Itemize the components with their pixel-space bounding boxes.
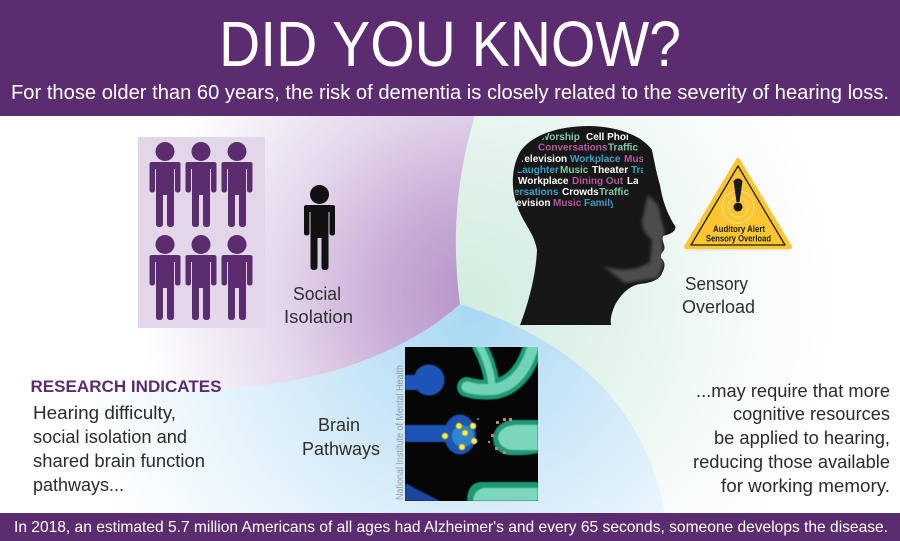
footer banner xyxy=(0,513,900,541)
label: sensory overload: Sensory xyxy=(685,274,748,294)
word cloud: Music xyxy=(560,165,589,176)
label: brain pathways: Brain xyxy=(318,415,360,435)
text block: conclusion: ...may require that more xyxy=(696,381,890,401)
header banner xyxy=(0,0,900,116)
text block: conclusion: cognitive resources xyxy=(733,404,890,424)
subtitle: For those older than 60 years, the risk of dementia is closely related to the severity of hearing loss. xyxy=(11,82,889,104)
body: shared brain function xyxy=(33,451,205,471)
word cloud: Workplace xyxy=(518,176,569,187)
word cloud: Dining Out xyxy=(572,176,624,187)
word cloud: Cell Phone xyxy=(586,132,638,143)
title: DID YOU KNOW? xyxy=(219,8,681,80)
body: pathways... xyxy=(33,475,124,495)
footer statistic: In 2018, an estimated 5.7 million Americans of all ages had Alzheimer's and every 65 seconds, someone develops the disease. xyxy=(14,519,888,536)
heading: RESEARCH INDICATES xyxy=(30,377,222,396)
word cloud: Music xyxy=(624,154,653,165)
word cloud: Theater xyxy=(592,165,628,176)
label: brain pathways xyxy=(302,415,380,459)
panel: brain pathways xyxy=(302,347,538,501)
body xyxy=(33,403,205,495)
word cloud: evision xyxy=(516,198,550,209)
word cloud: Traffic xyxy=(608,142,638,154)
label: social isolation: Isolation xyxy=(284,307,353,327)
crowd of six purple people xyxy=(138,137,265,328)
text block: conclusion xyxy=(693,381,890,496)
word cloud: Conversations xyxy=(538,142,608,154)
body: social isolation and xyxy=(33,427,187,447)
text block: conclusion: be applied to hearing, xyxy=(714,428,890,448)
word cloud: Traffic xyxy=(599,187,629,198)
label: social isolation: Social xyxy=(293,284,341,304)
word cloud: Television xyxy=(519,154,567,165)
word cloud: ersations xyxy=(514,187,559,198)
segment: blue brain pathways background xyxy=(0,304,665,514)
body: Hearing difficulty, xyxy=(33,403,176,423)
word cloud: Workplace xyxy=(570,154,621,165)
word cloud: Laughter xyxy=(627,176,670,187)
label: social isolation xyxy=(284,284,353,327)
segment: purple social isolation background xyxy=(0,116,475,388)
icon: head silhouette with words xyxy=(513,126,675,325)
label: sensory overload: Overload xyxy=(682,297,755,317)
background: three overlapping segments xyxy=(0,116,900,514)
text block: research indicates xyxy=(30,377,222,495)
icon: lone black person xyxy=(304,185,335,270)
icon: auditory alert warning sign xyxy=(686,160,790,250)
icon: auditory alert warning sign: Auditory Alert xyxy=(713,224,765,234)
panel: sensory overload xyxy=(513,126,790,325)
text block: conclusion: reducing those available xyxy=(693,452,890,472)
image: neuron synapse illustration xyxy=(405,347,538,501)
segment: green sensory background xyxy=(456,116,900,514)
word cloud: Worship xyxy=(540,132,580,143)
word cloud: Music xyxy=(553,198,582,209)
image credit: National Institute of Mental Health xyxy=(395,365,406,500)
word cloud: Crowds xyxy=(562,187,599,198)
word cloud: Laughter xyxy=(516,165,559,176)
panel: social isolation xyxy=(138,137,353,328)
icon: auditory alert warning sign: Sensory Overload xyxy=(706,234,771,244)
text block: conclusion: for working memory. xyxy=(721,476,890,496)
word cloud xyxy=(515,132,643,208)
word cloud: Family xyxy=(584,198,616,209)
label: sensory overload xyxy=(682,274,755,317)
label: brain pathways: Pathways xyxy=(302,439,380,459)
word cloud: Traffic xyxy=(631,165,661,176)
